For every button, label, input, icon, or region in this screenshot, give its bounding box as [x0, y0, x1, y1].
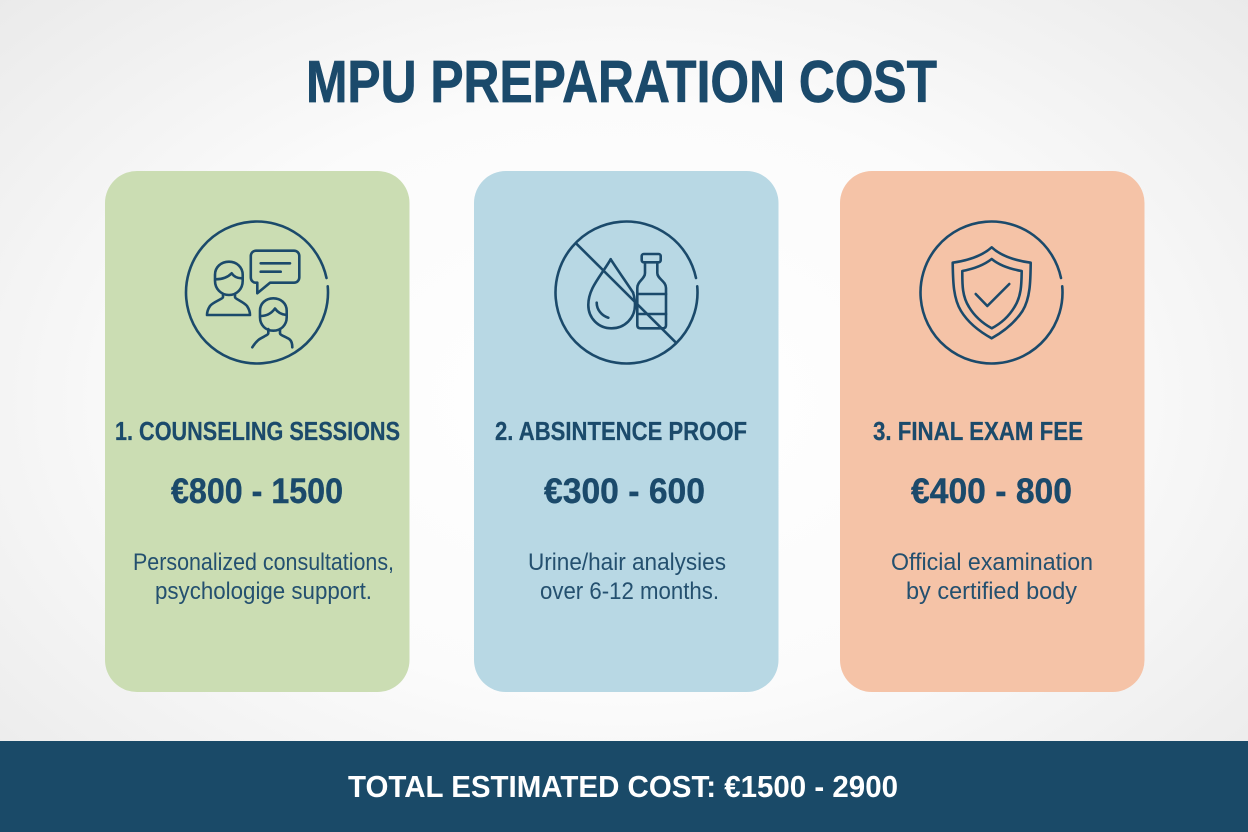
panel: final exam fee	[840, 171, 1144, 692]
title: MPU PREPARATION COST	[306, 49, 937, 115]
description: psychologige support.	[155, 578, 372, 605]
heading: 1. COUNSELING SESSIONS	[115, 416, 400, 446]
description: over 6-12 months.	[540, 578, 719, 605]
total cost banner	[0, 741, 1248, 832]
price: €400 - 800	[911, 472, 1072, 511]
icon: no alcohol	[550, 216, 703, 369]
price: €300 - 600	[544, 472, 705, 511]
panel: absintence proof	[474, 171, 778, 692]
description: Urine/hair analysies	[528, 549, 726, 576]
total cost text: TOTAL ESTIMATED COST: €1500 - 2900	[348, 769, 898, 804]
price: €800 - 1500	[171, 472, 343, 511]
panel: counseling sessions	[105, 171, 410, 692]
heading: 3. FINAL EXAM FEE	[873, 416, 1083, 446]
description	[891, 549, 1093, 605]
description: by certified body	[906, 578, 1077, 605]
description: Official examination	[891, 549, 1093, 576]
description	[528, 549, 726, 605]
icon: counseling	[180, 216, 334, 369]
description	[133, 549, 394, 605]
icon: shield	[915, 216, 1068, 369]
description: Personalized consultations,	[133, 549, 394, 576]
heading: 2. ABSINTENCE PROOF	[495, 416, 747, 446]
